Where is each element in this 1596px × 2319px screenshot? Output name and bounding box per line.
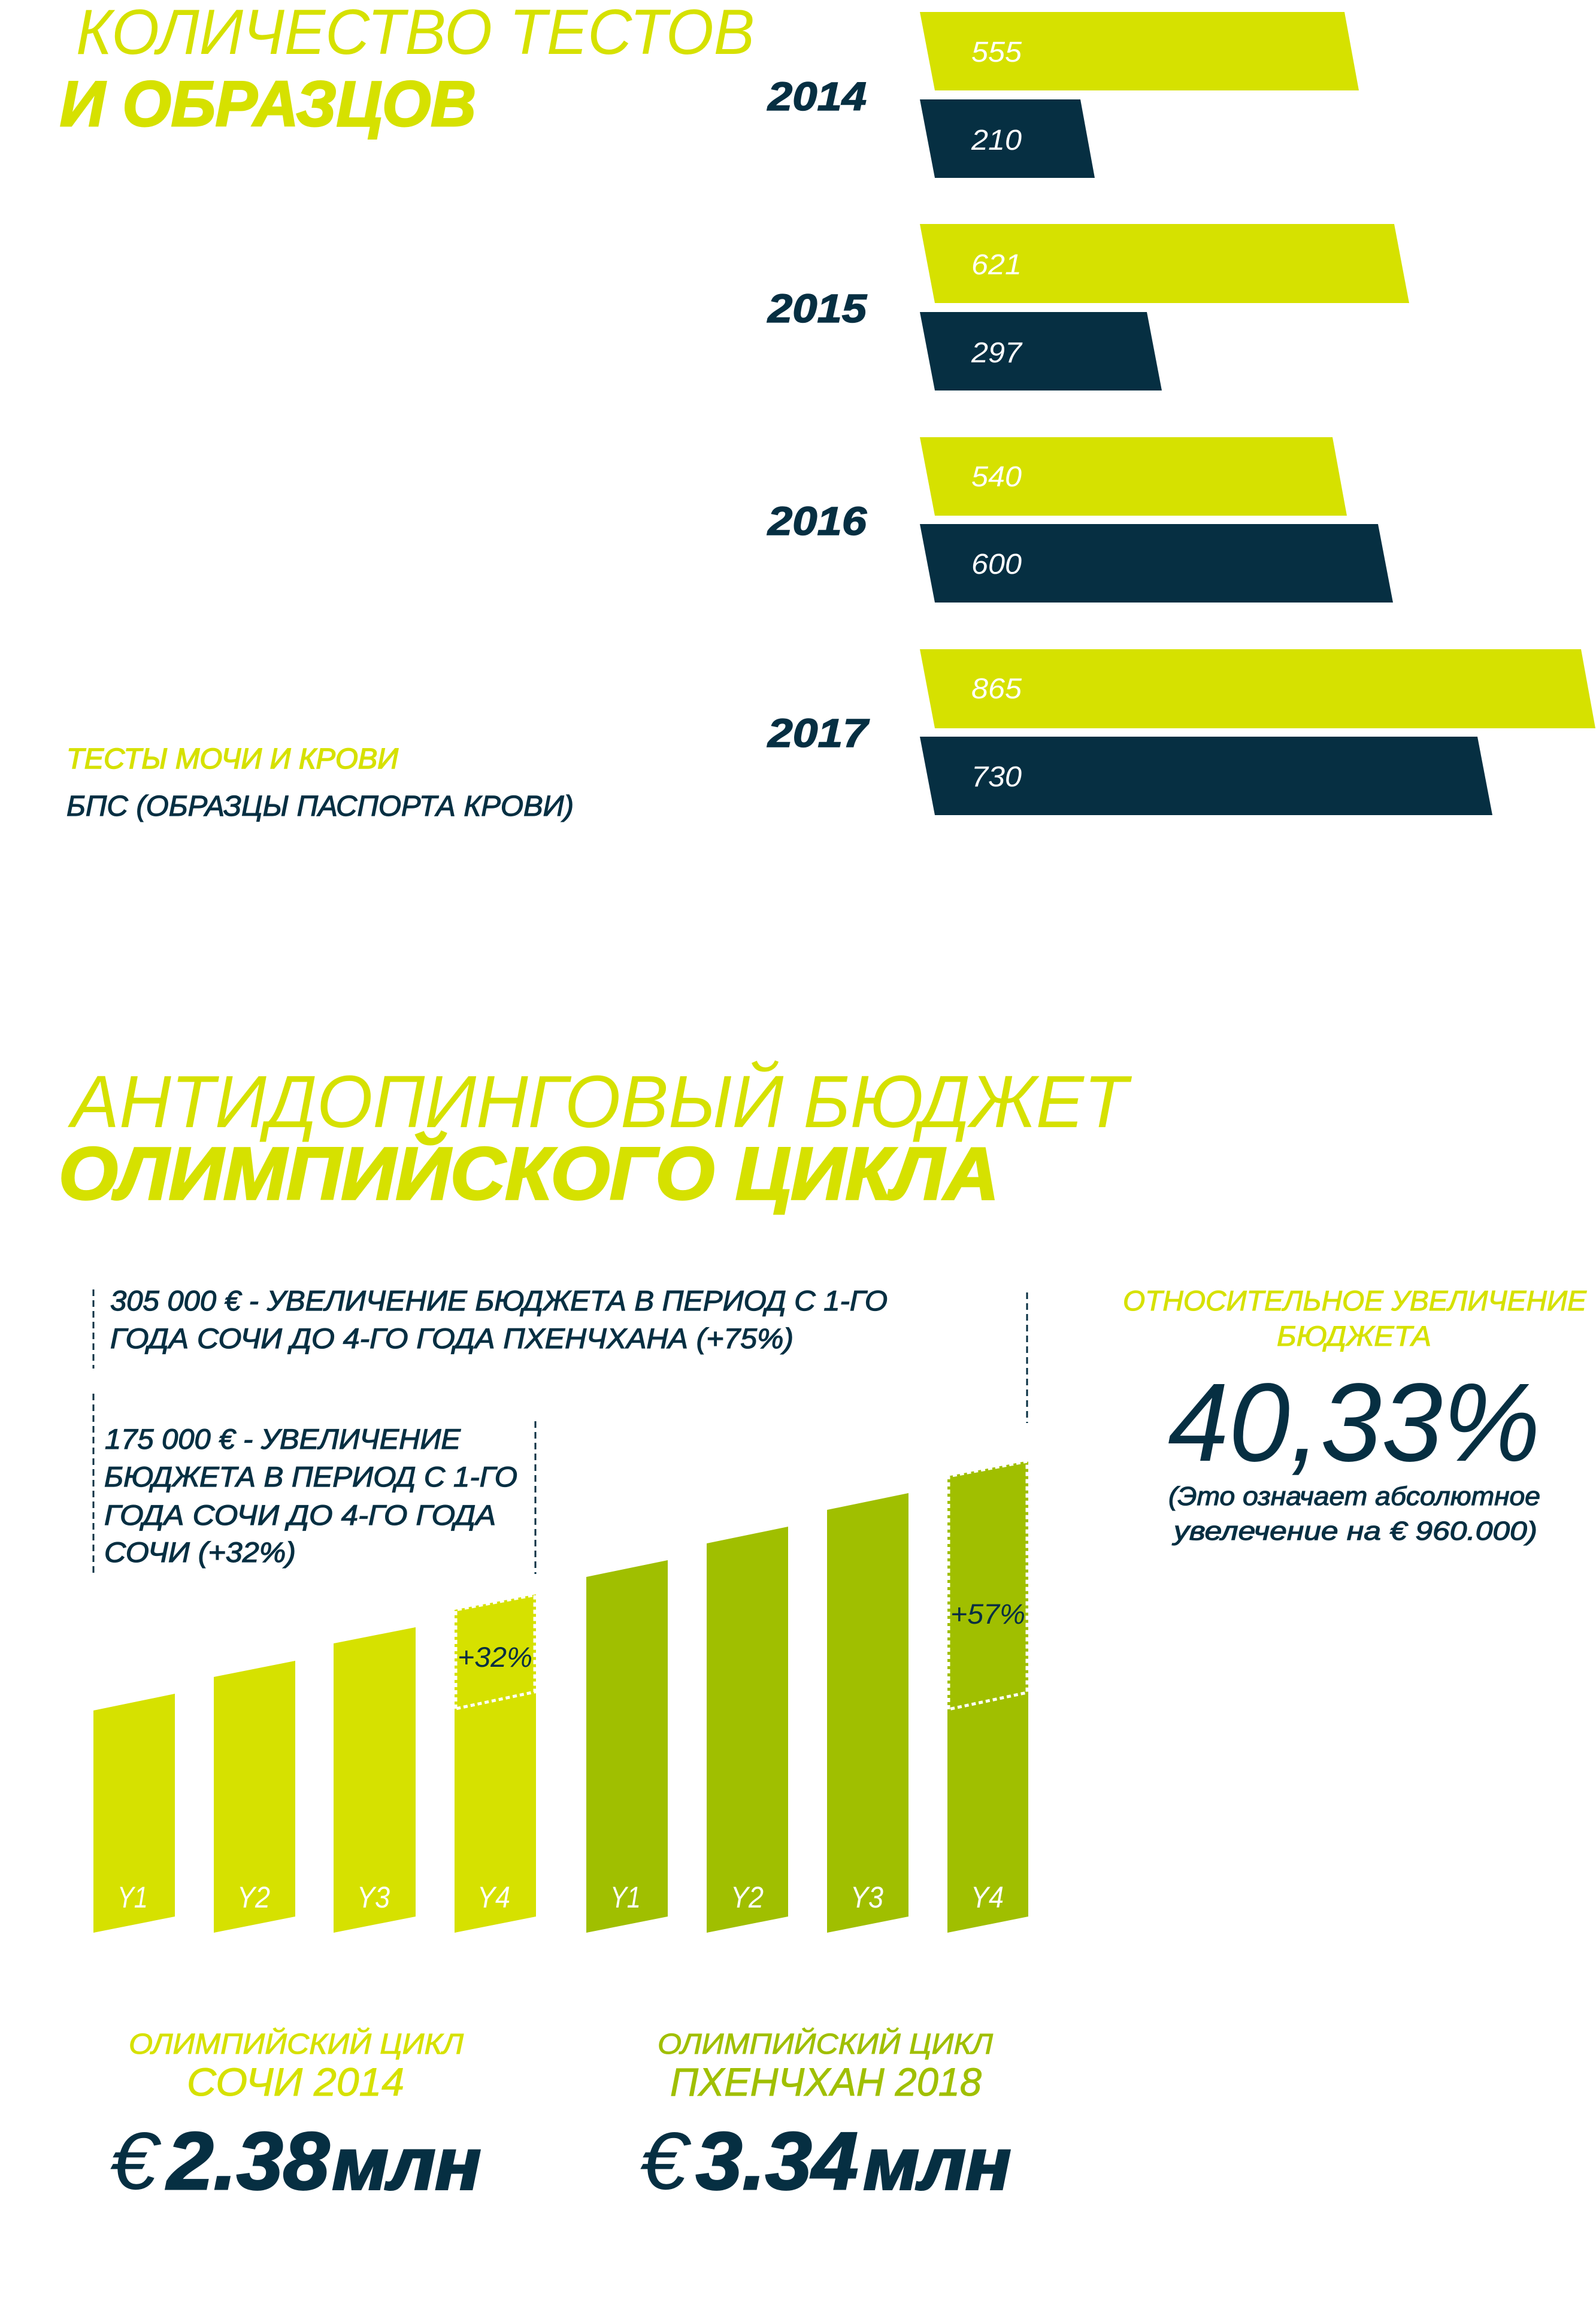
title: budget: АНТИДОПИНГОВЫЙ БЮДЖЕТ (67, 1061, 1132, 1143)
label: Sochi budget total: ОЛИМПИЙСКИЙ ЦИКЛ (129, 2027, 464, 2060)
bar group: 2016: 2016 (767, 499, 867, 544)
bar chart: Pyeongchang cycle: Y1 (610, 1881, 641, 1914)
bar group: 2017: 865 (971, 673, 1022, 705)
bar chart: Sochi cycle: Y3 (357, 1881, 390, 1914)
bar chart: Sochi cycle (93, 1594, 536, 1933)
callout: 175 000 euro increase: БЮДЖЕТА В ПЕРИОД С 1-ГО (104, 1461, 517, 1492)
bar group: 2016: 540 (971, 461, 1022, 493)
panel: relative budget increase: (Это означает абсолютное (1168, 1482, 1540, 1511)
bar chart: Pyeongchang cycle: Y3 (850, 1881, 883, 1914)
bar chart: Sochi cycle: Y1 (117, 1881, 148, 1914)
section: anti-doping budget (59, 1061, 1587, 2206)
label: Pyeongchang budget total (640, 2027, 1011, 2206)
label: Pyeongchang budget total: 3.34 (696, 2115, 858, 2206)
panel: relative budget increase: ОТНОСИТЕЛЬНОЕ УВЕЛИЧЕНИЕ (1123, 1285, 1587, 1316)
section: tests and samples (60, 0, 1595, 822)
title: tests and samples: И ОБРАЗЦОВ (60, 68, 476, 140)
callout: 175 000 euro increase: СОЧИ (+32%) (104, 1536, 296, 1568)
panel: relative budget increase (1123, 1285, 1587, 1546)
bar group: 2017 (767, 649, 1595, 815)
bar chart: Pyeongchang cycle: +57% (950, 1598, 1025, 1630)
label: Pyeongchang budget total: € (640, 2115, 692, 2206)
callout: 305 000 euro increase (93, 1285, 1027, 1423)
label: Sochi budget total: СОЧИ 2014 (187, 2060, 404, 2104)
callout: 305 000 euro increase: 305 000 € - УВЕЛИЧЕНИЕ БЮДЖЕТА В ПЕРИОД С 1-ГО (110, 1285, 888, 1316)
bar group: 2017: 730 (971, 761, 1022, 793)
callout: 305 000 euro increase: ГОДА СОЧИ ДО 4-ГО ГОДА ПХЕНЧХАНА (+75%) (110, 1322, 794, 1354)
bar group: 2015: 621 (971, 249, 1022, 281)
title: tests and samples (60, 0, 755, 140)
label: Sochi budget total (110, 2027, 481, 2206)
bar chart: Pyeongchang cycle: Y2 (731, 1881, 764, 1914)
legend (66, 743, 574, 822)
label: Sochi budget total: € (110, 2115, 162, 2206)
bar group: 2015: 2015 (767, 286, 868, 331)
bar chart: Sochi cycle: +32% (458, 1641, 532, 1673)
label: Sochi budget total: 2.38 (165, 2115, 329, 2206)
title: budget: ОЛИМПИЙСКОГО ЦИКЛА (59, 1132, 999, 1215)
legend: БПС (ОБРАЗЦЫ ПАСПОРТА КРОВИ) (66, 791, 574, 822)
bar group: 2016 (767, 437, 1393, 603)
label: Pyeongchang budget total: млн (864, 2123, 1011, 2205)
bar group: 2014: 555 (971, 37, 1022, 68)
callout: 175 000 euro increase: 175 000 € - УВЕЛИЧЕНИЕ (105, 1423, 461, 1455)
label: Pyeongchang budget total: ПХЕНЧХАН 2018 (670, 2060, 982, 2104)
callout: 175 000 euro increase: ГОДА СОЧИ ДО 4-ГО ГОДА (104, 1499, 496, 1531)
bar chart: Sochi cycle: Y4 (477, 1881, 510, 1914)
label: Sochi budget total: млн (332, 2123, 481, 2205)
bar group: 2015: 297 (971, 337, 1023, 369)
panel: relative budget increase: увелечение на € 960.000) (1171, 1516, 1537, 1546)
bar chart: Pyeongchang cycle (586, 1461, 1028, 1933)
panel: relative budget increase: БЮДЖЕТА (1277, 1320, 1431, 1352)
bar group: 2014: 210 (971, 125, 1022, 156)
label: Pyeongchang budget total: ОЛИМПИЙСКИЙ ЦИКЛ (658, 2027, 993, 2060)
panel: relative budget increase: 40,33% (1168, 1361, 1540, 1485)
bar chart: Sochi cycle: Y2 (237, 1881, 270, 1914)
bar group: 2015 (767, 224, 1409, 390)
callout: 175 000 euro increase (93, 1394, 535, 1574)
legend: ТЕСТЫ МОЧИ И КРОВИ (66, 743, 399, 775)
bar group: 2016: 600 (971, 549, 1022, 580)
bar chart: Pyeongchang cycle: Y4 (971, 1881, 1004, 1914)
bar group: 2014: 2014 (767, 74, 867, 119)
bar group: 2014 (767, 12, 1359, 178)
title: budget (59, 1061, 1132, 1215)
bar group: 2017: 2017 (767, 711, 870, 756)
